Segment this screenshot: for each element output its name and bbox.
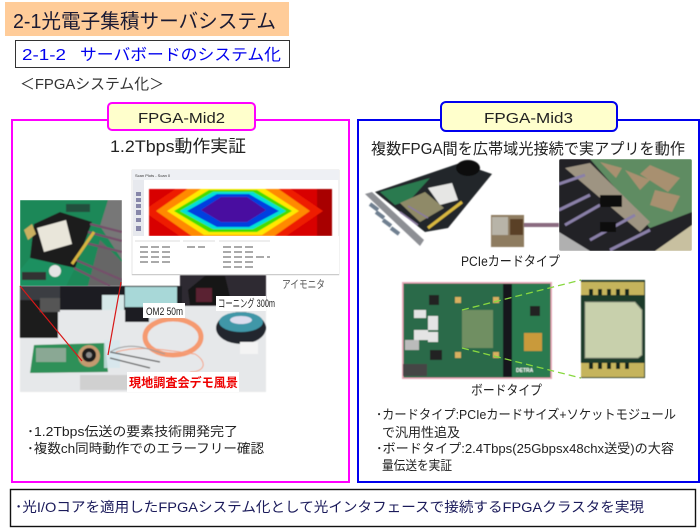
bullet text: Mid3 — [376, 407, 676, 473]
subtitle box — [16, 40, 290, 68]
bullet text: Mid3: 量伝送を実証 — [382, 458, 452, 473]
tab: FPGA-Mid3: FPGA-Mid3 — [484, 110, 573, 127]
label: Corning 300m: コーニング 300m — [218, 296, 275, 310]
photo: PCB inset — [20, 200, 122, 286]
bullet text: Mid2: ･複数ch同時動作でのエラーフリー確認 — [27, 441, 264, 456]
bullet text: Mid3: で汎用性追及 — [382, 425, 460, 440]
photo: board type: DETRA — [516, 368, 534, 374]
label: OM2 50m: OM2 50m — [146, 306, 183, 318]
panel heading: 1.2Tbps: 1.2Tbps動作実証 — [110, 137, 246, 156]
conclusion box — [10, 490, 696, 526]
photo: demo scene — [20, 275, 266, 392]
bullet text: Mid2: ･1.2Tbps伝送の要素技術開発完了 — [27, 424, 238, 439]
dashed leader lines — [462, 280, 581, 378]
eye diagram heat map — [148, 188, 333, 236]
section heading: ＜FPGAシステム化＞ — [20, 76, 164, 93]
caption: board type: ボードタイプ — [471, 383, 542, 398]
eye monitor window — [132, 170, 339, 275]
photo: board type — [402, 282, 552, 379]
caption: PCIe card type: PCIeカードタイプ — [461, 254, 560, 269]
tab: FPGA-Mid2: FPGA-Mid2 — [138, 110, 225, 127]
label: demo scene — [127, 372, 239, 392]
panel heading: Mid3: 複数FPGA間を広帯域光接続で実アプリを動作 — [371, 140, 685, 158]
label: eye monitor: アイモニタ — [282, 278, 325, 291]
callout lines — [20, 282, 121, 361]
title: 2-1光電子集積サーバシステム — [13, 10, 276, 33]
photo: socket module and cable — [491, 215, 559, 247]
tab: FPGA-Mid3 — [441, 102, 617, 131]
photo: module close-up — [559, 159, 692, 251]
title — [5, 2, 289, 36]
bullet text: Mid2 — [27, 424, 264, 456]
eye monitor window: Scan Plots - Scan 0 — [135, 173, 171, 178]
photo: chip close-up — [581, 280, 645, 378]
label: OM2 50m — [143, 303, 185, 318]
panel: FPGA-Mid3 — [358, 120, 699, 482]
label: Corning 300m — [216, 296, 275, 311]
conclusion box: ･光I/Oコアを適用したFPGAシステム化として光インタフェースで接続するFPGAクラスタを実現 — [15, 499, 644, 515]
tab: FPGA-Mid2 — [108, 103, 255, 130]
photo: PCIe card — [365, 160, 492, 246]
label: demo scene: 現地調査会デモ風景 — [129, 375, 238, 390]
subtitle box: サーバボードのシステム化 — [80, 46, 281, 64]
bullet text: Mid3: ･カードタイプ:PCIeカードサイズ+ソケットモジュール — [376, 407, 676, 422]
panel: FPGA-Mid2 — [12, 120, 349, 482]
subtitle box: 2-1-2 — [22, 47, 66, 64]
bullet text: Mid3: ･ボードタイプ:2.4Tbps(25Gbpsx48chx送受)の大容 — [376, 441, 674, 456]
